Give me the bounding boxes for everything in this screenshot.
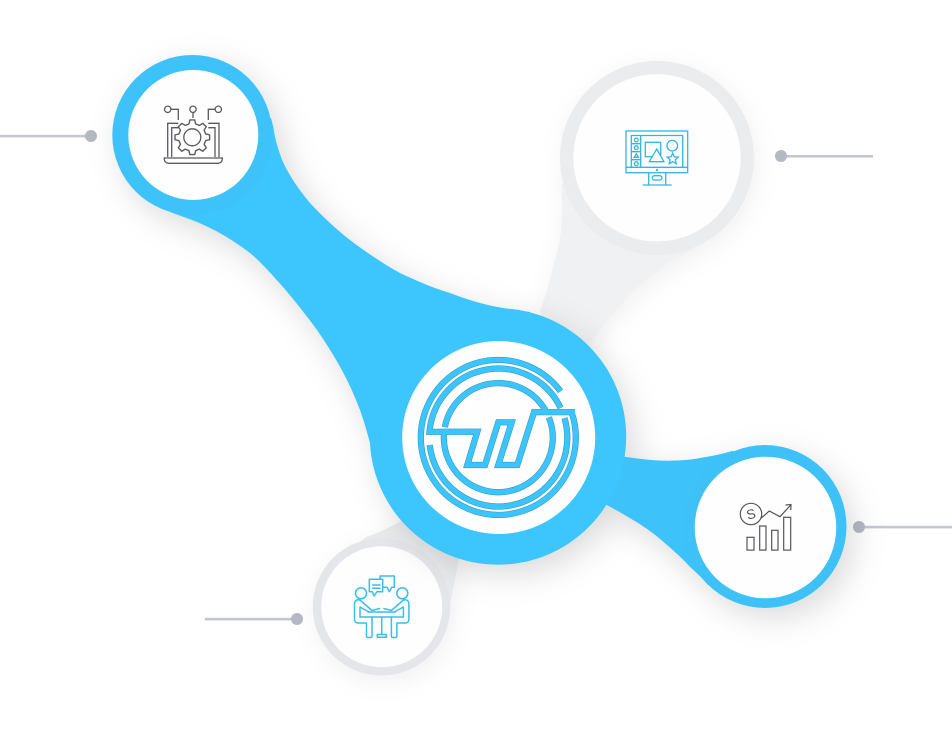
arm: bottom left grey node — [313, 436, 498, 676]
blue hub network — [112, 55, 847, 608]
icon: design monitor — [626, 131, 688, 185]
center logo — [421, 360, 576, 515]
icon: finance chart — [740, 503, 791, 550]
icon: finance chart: S — [745, 506, 757, 523]
pointer: top right — [775, 150, 873, 162]
pointer: right — [853, 521, 952, 533]
node: center white disc — [402, 341, 595, 534]
pointer: top left — [0, 130, 97, 142]
pointer: bottom left — [205, 613, 303, 625]
node: top left white disc — [128, 70, 258, 200]
icon: meeting people — [354, 576, 409, 638]
node: right white disc — [695, 457, 836, 598]
icon: laptop with gear — [164, 106, 222, 163]
arm: top right grey node — [540, 61, 754, 360]
